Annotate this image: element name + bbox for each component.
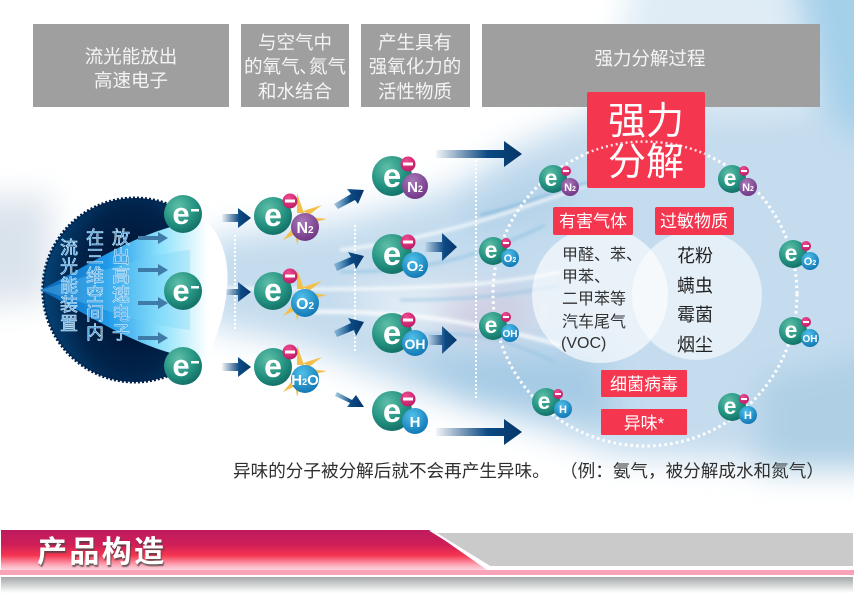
text: allergens list: 烟尘 [677, 335, 713, 355]
panel: header 与空气中的氧气氮气和水结合: 和水结合 [258, 81, 332, 102]
callout: 强力分解 [587, 92, 705, 188]
panel: header 产生具有强氧化力的活性物质 [361, 24, 470, 107]
molecule: e O2 with burst [254, 268, 327, 321]
background: blue air stream [0, 0, 854, 470]
molecule: e N2 with burst: e [264, 197, 282, 233]
section banner: 产品构造 [0, 530, 854, 593]
radical: e OH: e [383, 314, 401, 351]
small radical: OH right: e [785, 317, 797, 343]
small radical: O2 right: e [785, 240, 797, 266]
small radical: N2 right: e [724, 165, 736, 191]
text: harmful gases list: 汽车尾气 [562, 313, 626, 331]
molecule: e N2 with burst: N2 [296, 220, 314, 237]
arrows: to decomposition circle [425, 141, 522, 445]
panel: header 产生具有强氧化力的活性物质: 产生具有 [378, 32, 452, 53]
label: 有害气体: 有害气体 [559, 212, 627, 231]
small radical: O2 right [779, 240, 819, 270]
small radical: OH left: e [485, 312, 497, 338]
small radical: N2 left [539, 165, 579, 196]
small radical: O2 left: e [485, 237, 497, 263]
molecule: e O2 with burst: O2 [296, 296, 314, 313]
molecule: e H2O with burst: e [264, 348, 282, 384]
small radical: H right: H [744, 410, 752, 422]
label: 细菌病毒 [601, 370, 687, 397]
text: allergens list: 花粉 [677, 246, 713, 266]
radical: e N2 [372, 156, 428, 199]
molecule: e O2 with burst: e [264, 272, 282, 308]
callout: 强力分解: 强力 [608, 101, 684, 143]
small radical: OH left [479, 312, 519, 342]
small radical: OH right [779, 317, 819, 347]
footnote text [233, 461, 824, 481]
electron e- bottom: e [172, 348, 190, 383]
small radical: H right [718, 393, 757, 424]
text: allergens list: 霉菌 [677, 305, 713, 325]
text: 流光能装置: 流光能装置 [58, 238, 78, 333]
small radical: OH left: OH [502, 329, 518, 340]
small radical: N2 right [718, 165, 757, 196]
arrows: horizontal to second column [222, 208, 251, 377]
panel: header 强力分解过程 [482, 24, 820, 107]
molecule: e N2 with burst [254, 193, 327, 245]
panel: header 与空气中的氧气氮气和水结合: 与空气中 [258, 32, 332, 53]
venn: circles [532, 227, 762, 363]
text: harmful gases list: (VOC) [561, 335, 606, 352]
radical: e H [372, 391, 428, 434]
label: 异味*: 异味* [624, 414, 665, 433]
text: 放出高速电子: 放出高速电子 [110, 228, 130, 342]
text: allergens list [677, 246, 713, 355]
electron e- middle: e [172, 273, 190, 308]
small radical: H right: e [724, 393, 736, 419]
electron e- middle [164, 272, 202, 310]
electron e- bottom [164, 347, 202, 385]
footnote text: （例：氨气，被分解成水和氮气） [560, 461, 824, 481]
text: harmful gases list [561, 246, 642, 352]
arrows: diagonal to third column [334, 189, 364, 407]
dotted guide lines [235, 160, 476, 400]
small radical: OH right: OH [802, 334, 818, 345]
small radical: H left: e [538, 388, 550, 414]
electron e- top [164, 195, 202, 233]
radical: e N2: e [383, 157, 401, 194]
small radical: O2 left [479, 237, 519, 267]
arrows inside beam [138, 232, 168, 344]
panel: header 流光能放出高速电子: 流光能放出 [85, 46, 177, 67]
radical: e O2: e [383, 235, 401, 272]
molecule: e H2O with burst: H2O [291, 372, 319, 389]
dotted circle [493, 142, 797, 446]
electron e- top: e [172, 196, 190, 231]
radical: e OH: OH [404, 336, 426, 352]
panel: header 与空气中的氧气氮气和水结合: 的氧气､氮气 [244, 56, 346, 77]
radical: e H: H [410, 414, 420, 431]
label: 过敏物质 [655, 207, 734, 235]
small radical: N2 left: N2 [564, 182, 576, 194]
panel: header 产生具有强氧化力的活性物质: 活性物质 [378, 81, 452, 102]
panel: header 产生具有强氧化力的活性物质: 强氧化力的 [369, 56, 461, 77]
small radical: N2 right: N2 [742, 182, 754, 194]
text: 在三维空间内: 在三维空间内 [84, 228, 104, 342]
text: allergens list: 螨虫 [677, 276, 713, 296]
panel: header 强力分解过程: 强力分解过程 [594, 48, 706, 69]
small radical: H left: H [559, 404, 567, 416]
label: 细菌病毒: 细菌病毒 [610, 375, 678, 394]
small radical: H left [532, 388, 572, 418]
text: harmful gases list: 甲苯、 [562, 268, 610, 286]
dotted arc over callout [587, 142, 705, 154]
small radical: N2 left: e [545, 165, 557, 191]
device: 流光能装置 with light beam [40, 198, 228, 382]
molecule: e H2O with burst [254, 344, 327, 397]
footnote text: 异味的分子被分解后就不会再产生异味。 [233, 461, 550, 481]
radical: e O2 [372, 234, 428, 278]
label: 异味* [601, 409, 687, 435]
radical: e H: e [383, 392, 401, 429]
label: 有害气体 [553, 207, 633, 235]
panel: header 流光能放出高速电子: 高速电子 [94, 70, 168, 91]
radical: e N2: N2 [407, 179, 423, 196]
label: 过敏物质: 过敏物质 [660, 212, 728, 231]
callout: 强力分解: 分解 [608, 142, 684, 184]
panel: header 流光能放出高速电子 [33, 24, 229, 107]
radical: e OH [372, 312, 428, 356]
small radical: O2 left: O2 [504, 253, 516, 265]
section banner: 产品构造: 产品构造 [37, 536, 164, 569]
panel: header 与空气中的氧气氮气和水结合 [241, 24, 349, 107]
radical: e O2: O2 [407, 258, 423, 275]
small radical: O2 right: O2 [804, 256, 816, 268]
text: harmful gases list: 二甲苯等 [562, 290, 626, 308]
text: harmful gases list: 甲醛、苯、 [562, 246, 642, 264]
